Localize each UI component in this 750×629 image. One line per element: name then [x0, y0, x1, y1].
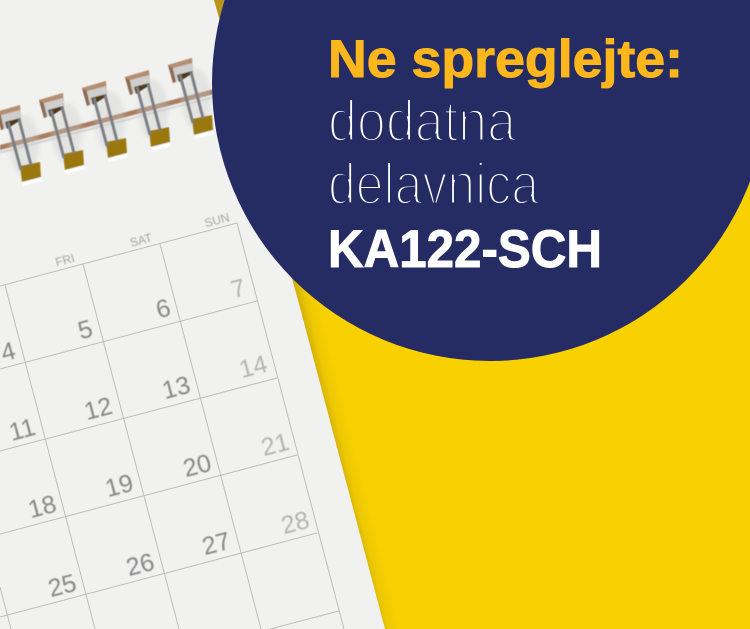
calendar day numbers: 12	[81, 392, 115, 426]
calendar day numbers: 5	[75, 315, 96, 345]
calendar day numbers: 26	[123, 548, 157, 582]
calendar day numbers: 13	[159, 371, 193, 405]
calendar day numbers: 6	[153, 294, 174, 324]
heading line: dodatna: dodatna	[328, 89, 517, 154]
calendar day numbers	[0, 274, 312, 603]
calendar day numbers: 18	[25, 490, 59, 524]
weekday labels	[54, 210, 231, 269]
weekday labels: SAT	[128, 230, 154, 250]
spiral rings	[0, 58, 214, 186]
calendar day numbers: 25	[45, 569, 79, 603]
calendar day numbers: 20	[180, 449, 214, 483]
heading line: KA122-SCH: KA122-SCH	[328, 220, 602, 279]
calendar day numbers: 21	[258, 428, 292, 462]
calendar grid	[0, 223, 344, 629]
calendar day numbers: 28	[278, 506, 312, 540]
calendar binding strip	[0, 89, 214, 154]
calendar day numbers: 27	[199, 527, 233, 561]
dark corner behind calendar	[214, 0, 226, 18]
calendar day numbers: 7	[228, 274, 249, 304]
navy circle	[212, 0, 750, 361]
heading line: Ne spreglejte: Ne spreglejte:	[328, 30, 683, 89]
weekday labels: FRI	[54, 251, 76, 269]
calendar day numbers: 14	[236, 350, 270, 384]
heading	[328, 30, 683, 279]
heading line: delavnica: delavnica	[328, 152, 540, 217]
calendar page	[0, 0, 385, 629]
calendar day numbers: 19	[102, 469, 136, 503]
paper shadow on yellow	[205, 0, 410, 629]
calendar day numbers: 11	[6, 413, 38, 447]
weekday labels: SUN	[203, 210, 231, 230]
